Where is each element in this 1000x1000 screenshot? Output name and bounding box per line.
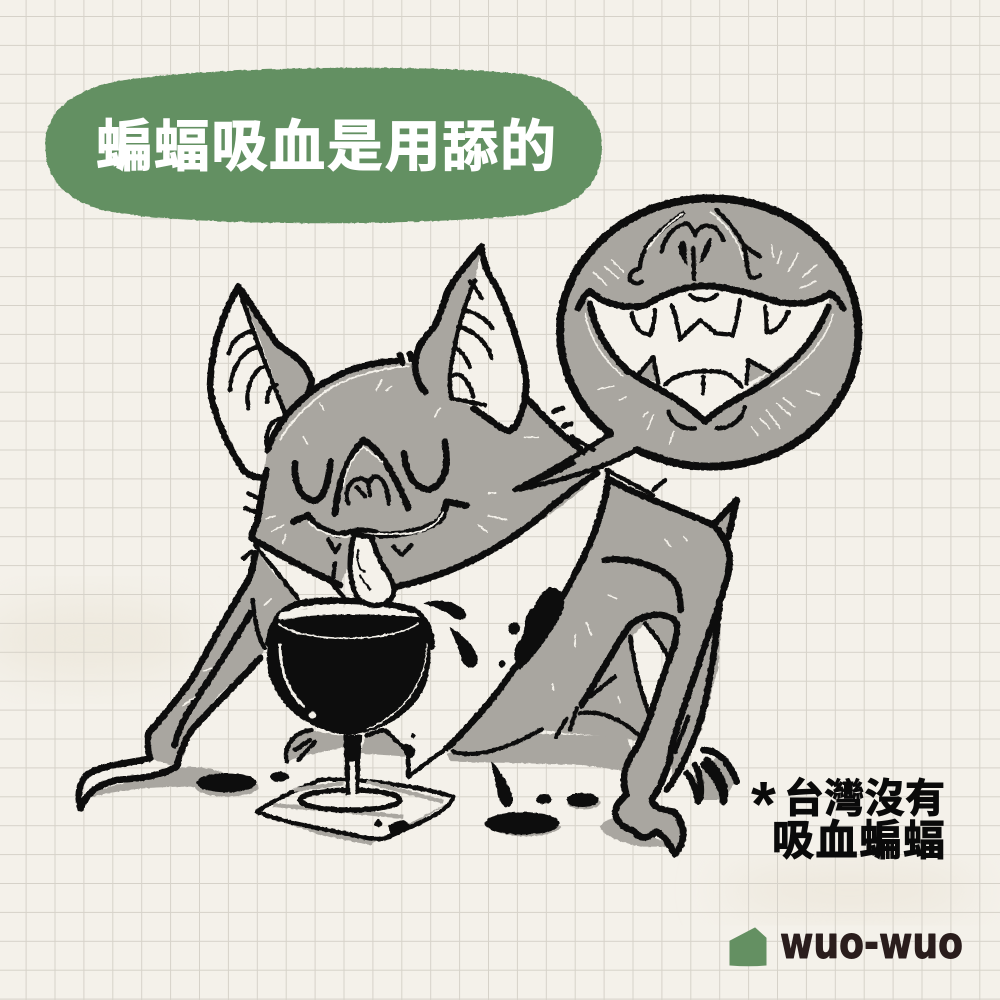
speech bubble with mouth close-up xyxy=(515,198,858,500)
coaster, wine glass and front foot xyxy=(195,601,478,845)
note line 1: 台灣沒有 xyxy=(784,777,945,821)
logo xyxy=(730,918,963,969)
left arm xyxy=(79,545,300,808)
open mouth xyxy=(587,287,830,420)
title banner xyxy=(45,68,602,223)
tongue xyxy=(332,535,394,605)
glass bowl xyxy=(267,613,430,735)
logo wordmark: wuo-wuo xyxy=(780,918,963,969)
body and hind leg xyxy=(447,480,737,855)
bubble shape xyxy=(520,198,858,492)
note line 2: 吸血蝙蝠 xyxy=(772,817,945,864)
left ear xyxy=(210,287,312,477)
splash drops xyxy=(423,601,466,620)
foot behind glass xyxy=(286,730,448,777)
highlights xyxy=(593,245,819,443)
note asterisk: * xyxy=(751,768,776,840)
bat head and ears xyxy=(210,247,600,605)
right ear xyxy=(415,247,526,431)
closed eyes xyxy=(295,442,446,501)
ground shadows xyxy=(83,730,408,800)
head shape xyxy=(252,363,600,588)
blood splatter xyxy=(485,587,601,836)
coaster xyxy=(257,779,453,845)
inner tongue xyxy=(665,371,742,393)
teeth xyxy=(632,295,788,383)
logo house icon xyxy=(730,928,766,966)
smile and fangs xyxy=(293,502,467,555)
head outline xyxy=(280,366,410,440)
nose xyxy=(335,440,408,513)
glass stem xyxy=(343,735,362,795)
title text: 蝙蝠吸血是用舔的 xyxy=(96,115,556,178)
lower lip marks xyxy=(668,407,745,429)
note: no vampire bats in Taiwan xyxy=(751,768,945,864)
neck hairs xyxy=(555,408,665,500)
nose close-up xyxy=(630,210,760,283)
highlights xyxy=(267,380,538,543)
blots xyxy=(195,777,258,797)
illustration: vampire bat licking blood from a wine glass xyxy=(79,198,858,855)
